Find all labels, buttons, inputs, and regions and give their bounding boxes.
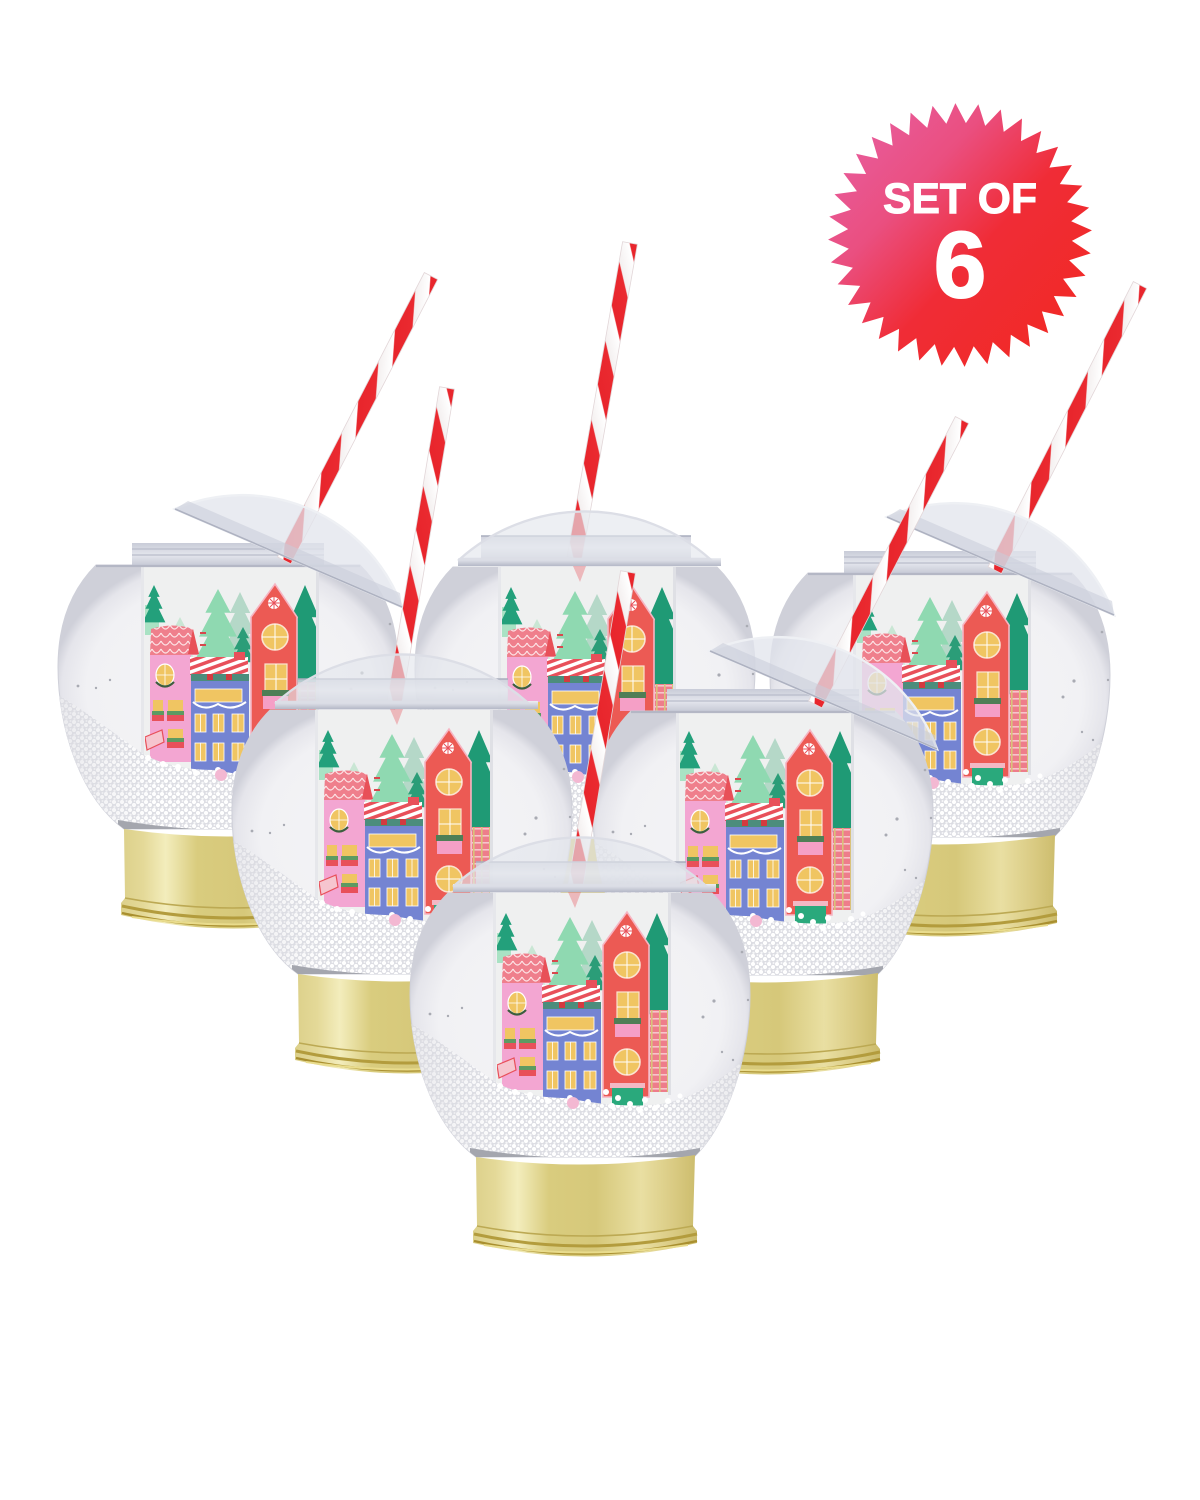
cup neck: back centre: [458, 536, 721, 582]
snow globe: back right, lid tilted open: [760, 282, 1147, 936]
dome lid: back centre: [460, 511, 710, 559]
globe body: middle right: [583, 703, 943, 1074]
badge text: SET OF: SET OF: [883, 175, 1037, 223]
badge number: 6: 6: [934, 212, 986, 317]
globe body: back left: [48, 557, 408, 928]
straw: middle right: [809, 417, 969, 708]
snow globe: middle left: [222, 387, 582, 1074]
globe body: back right: [760, 565, 1120, 936]
straw: back left: [278, 273, 438, 564]
straw: front centre: [568, 571, 635, 889]
cup neck: middle right: [631, 689, 895, 713]
dome lid: middle left: [277, 654, 527, 702]
globe body: front centre: [400, 885, 760, 1256]
snow globe: front centre: [400, 571, 760, 1256]
badge: set of 6: [823, 98, 1097, 372]
globe body: middle left: [222, 702, 582, 1074]
cup neck: front centre: [453, 862, 716, 908]
cup neck: back right: [808, 551, 1072, 575]
straw: back right: [988, 282, 1147, 574]
globe body: back centre: [405, 559, 765, 930]
lid: middle right: [710, 637, 937, 749]
straw: back centre: [567, 242, 637, 559]
cup neck: middle left: [275, 679, 538, 725]
lid: back left: [175, 495, 402, 607]
straw: middle left: [387, 387, 454, 705]
snow globe: back centre: [405, 242, 765, 930]
snow globe: middle right, lid tilted open: [583, 417, 969, 1074]
lid: back right: [887, 503, 1114, 615]
snow globe: back left, lid tilted open: [48, 273, 438, 928]
cup neck: back left: [96, 543, 360, 567]
dome lid: front centre: [455, 837, 705, 885]
badge starburst: [823, 98, 1097, 372]
